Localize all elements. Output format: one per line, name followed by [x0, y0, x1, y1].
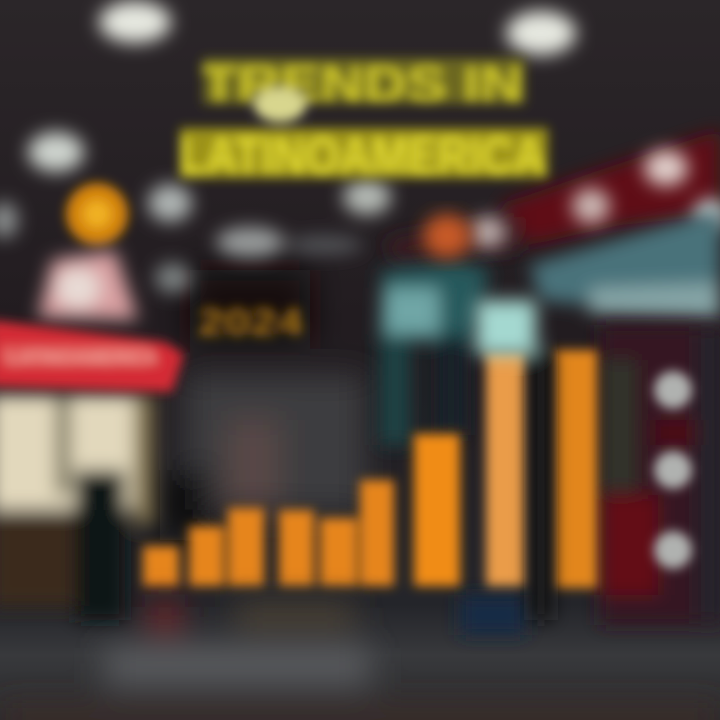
red banner: LATINOAMERICA	[8, 348, 158, 368]
small yellow chart label: 2024	[198, 302, 303, 344]
light teal column top	[476, 300, 552, 620]
icon: orange sun badge	[66, 183, 128, 245]
orange head	[423, 214, 471, 258]
red banner	[0, 320, 184, 392]
bar chart	[143, 350, 597, 588]
panel: dark red shelf with circles	[600, 325, 720, 625]
title: TRENDS IN	[201, 56, 523, 112]
panel: cream storefront	[0, 395, 154, 620]
pink figure	[38, 250, 138, 320]
dark red roof	[385, 130, 720, 262]
mid grey backdrop	[160, 270, 365, 540]
glowing white circles	[0, 1, 720, 293]
title	[179, 56, 548, 186]
title: LATINOAMERICA	[179, 126, 545, 186]
teal figures	[378, 210, 720, 635]
ground reflections	[0, 605, 720, 720]
